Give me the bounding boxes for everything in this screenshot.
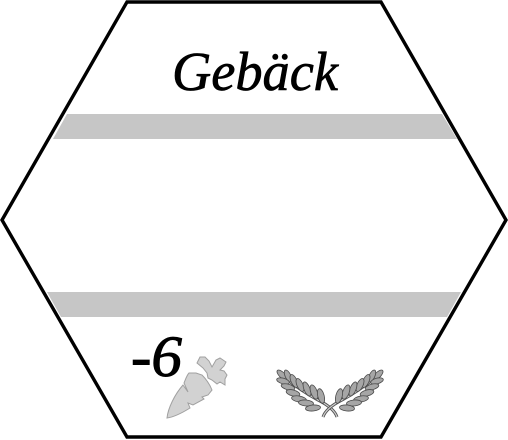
carrot leaves — [197, 357, 227, 385]
cost number: -6 — [131, 324, 182, 389]
title: Gebäck — [172, 41, 340, 102]
left branch — [275, 368, 337, 417]
upper grey band — [53, 114, 457, 139]
carrot body — [167, 373, 212, 418]
icon: carrot — [167, 357, 227, 418]
lower grey band — [47, 292, 461, 317]
right branch — [323, 368, 385, 417]
icon: laurel wreath — [275, 368, 385, 417]
